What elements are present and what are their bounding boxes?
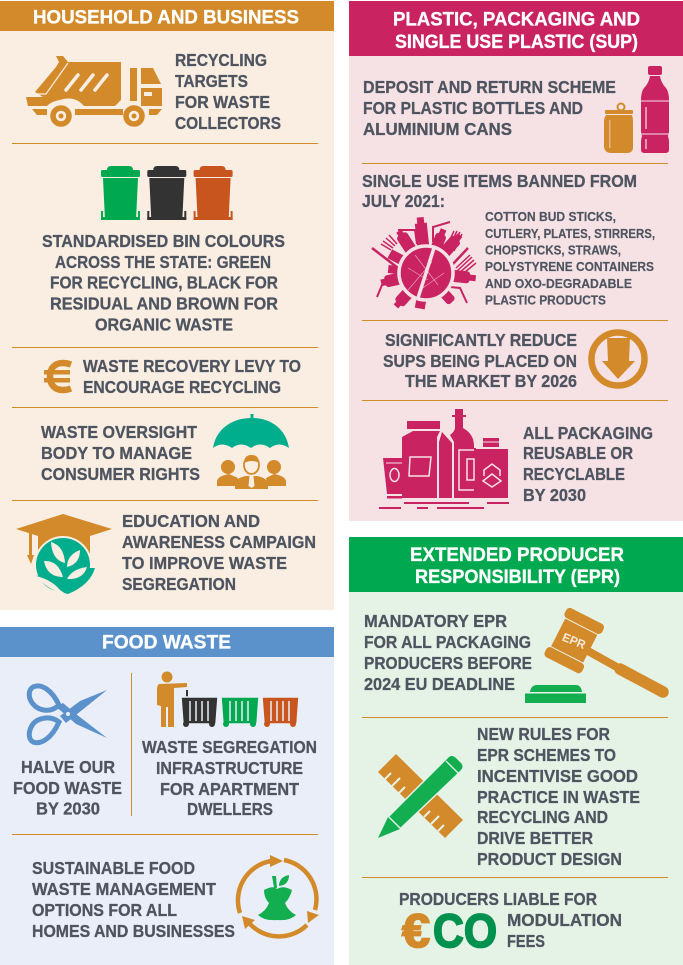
text: significantly reduce [383, 330, 577, 391]
text: waste segregation infrastructure: DWELLERS [187, 799, 273, 819]
text: single use items banned: SINGLE USE ITEMS BANNED FROM [362, 171, 637, 191]
panel: household and business [0, 1, 334, 610]
icon: gavel [525, 607, 663, 703]
panel: plastic, packaging and SUP [349, 1, 683, 521]
text: deposit and return [363, 77, 616, 139]
text: mandatory EPR: MANDATORY EPR [364, 611, 507, 631]
text: deposit and return: FOR PLASTIC BOTTLES AND [363, 98, 583, 118]
icon: person and bins [157, 672, 299, 727]
heading: food waste [0, 627, 334, 657]
text: all packaging reusable [523, 423, 653, 505]
logo: euro eco [402, 904, 497, 957]
icon: brown bin [194, 166, 233, 220]
heading: household and business [0, 1, 334, 31]
icon: can [604, 104, 633, 153]
text: modulation fees [507, 910, 622, 951]
logo: euro eco: CO [433, 904, 497, 957]
text: sustainable food waste: HOMES AND BUSINESSES [32, 921, 235, 941]
text: banned items list: AND OXO-DEGRADABLE [485, 276, 632, 291]
text: halve our food waste: BY 2030 [36, 798, 100, 818]
icon: packaging [379, 409, 509, 509]
text: new rules for EPR schemes: PRODUCT DESIGN [477, 849, 622, 869]
text: waste segregation infrastructure: WASTE SEGREGATION [142, 737, 317, 757]
text: standardised bin colours: FOR RECYCLING, BLACK FOR [50, 272, 278, 292]
text: banned items list: CUTLERY, PLATES, STIRRERS, [485, 226, 655, 241]
text: standardised bin colours: RESIDUAL AND BROWN FOR [50, 294, 278, 314]
text: waste oversight body: WASTE OVERSIGHT [41, 422, 197, 442]
text: all packaging reusable: ALL PACKAGING [523, 423, 653, 443]
text: recycling targets [175, 50, 281, 133]
heading: extended producer responsibility: RESPONSIBILITY (EPR) [415, 567, 620, 588]
icon: euro [44, 363, 71, 390]
icon: ruler and pencil [378, 754, 463, 838]
text: waste oversight body: CONSUMER RIGHTS [41, 464, 200, 484]
text: deposit and return: DEPOSIT AND RETURN SCHEME [363, 77, 616, 97]
panel: food waste [0, 627, 334, 965]
text: sustainable food waste: OPTIONS FOR ALL [32, 900, 177, 920]
text: new rules for EPR schemes: PRACTICE IN WASTE [477, 787, 640, 807]
text: significantly reduce: THE MARKET BY 2026 [405, 371, 577, 391]
icon: scissors [29, 686, 107, 743]
text: recycling targets: RECYCLING [175, 50, 267, 70]
panel: extended producer responsibility [349, 537, 683, 965]
text: all packaging reusable: RECYCLABLE [523, 464, 625, 484]
text: education and awareness: SEGREGATION [122, 574, 236, 594]
icon: down arrow in circle [592, 332, 644, 386]
text: all packaging reusable: REUSABLE OR [523, 443, 633, 463]
text: standardised bin colours: ACROSS THE STATE: GREEN [55, 252, 271, 272]
text: waste segregation infrastructure: INFRASTRUCTURE [156, 758, 303, 778]
heading: plastic, packaging and SUP: PLASTIC, PACKAGING AND [393, 10, 640, 30]
text: producers liable for: PRODUCERS LIABLE FOR [399, 889, 597, 909]
text: new rules for EPR schemes: DRIVE BETTER [477, 828, 593, 848]
text: waste segregation infrastructure [142, 737, 317, 819]
text: sustainable food waste: WASTE MANAGEMENT [32, 879, 216, 899]
text: single use items banned [362, 171, 637, 211]
icon: black bin [147, 166, 186, 220]
text: education and awareness: AWARENESS CAMPAIGN [122, 532, 316, 552]
text: recycling targets: FOR WASTE [175, 92, 270, 112]
heading: extended producer responsibility [349, 537, 683, 592]
text: new rules for EPR schemes: INCENTIVISE GOOD [477, 766, 638, 786]
text: recycling targets: TARGETS [175, 71, 248, 91]
text: banned items list [485, 209, 655, 308]
text: modulation fees: FEES [507, 931, 545, 951]
icon: umbrella over consumers [213, 414, 289, 489]
text: single use items banned: JULY 2021: [362, 191, 445, 211]
text: standardised bin colours: STANDARDISED BIN COLOURS [42, 231, 285, 251]
logo: euro eco: € [402, 904, 430, 957]
text: waste segregation infrastructure: FOR APARTMENT [160, 779, 299, 799]
text: new rules for EPR schemes: EPR SCHEMES TO [477, 745, 616, 765]
text: halve our food waste [13, 757, 122, 818]
heading: extended producer responsibility: EXTENDED PRODUCER [410, 545, 624, 566]
text: all packaging reusable: BY 2030 [523, 485, 586, 505]
icon: gavel: EPR [560, 630, 588, 652]
text: waste oversight body: BODY TO MANAGE [41, 443, 192, 463]
heading: plastic, packaging and SUP: SINGLE USE PLASTIC (SUP) [395, 32, 638, 53]
text: education and awareness [122, 511, 316, 594]
text: new rules for EPR schemes: RECYCLING AND [477, 807, 608, 827]
text: education and awareness: TO IMPROVE WASTE [122, 553, 287, 573]
text: banned items list: CHOPSTICKS, STRAWS, [485, 242, 621, 258]
text: waste recovery levy: ENCOURAGE RECYCLING [83, 377, 281, 397]
text: halve our food waste: FOOD WASTE [13, 778, 122, 798]
text: banned items list: PLASTIC PRODUCTS [485, 292, 606, 308]
text: education and awareness: EDUCATION AND [122, 511, 260, 531]
icon: banned single use items [372, 217, 476, 310]
text: mandatory EPR [364, 611, 532, 694]
heading: plastic, packaging and SUP [349, 1, 683, 56]
text: halve our food waste: HALVE OUR [21, 757, 115, 777]
text: sustainable food waste: SUSTAINABLE FOOD [32, 858, 195, 878]
icon: apple core in cycle [238, 855, 319, 936]
text: standardised bin colours [42, 231, 285, 334]
text: banned items list: COTTON BUD STICKS, [485, 209, 616, 224]
text: waste oversight body [41, 422, 200, 484]
text: mandatory EPR: 2024 EU DEADLINE [364, 674, 515, 694]
text: modulation fees: MODULATION [507, 910, 622, 930]
text: mandatory EPR: FOR ALL PACKAGING [364, 632, 531, 652]
text: new rules for EPR schemes: NEW RULES FOR [477, 724, 610, 744]
heading: food waste: FOOD WASTE [102, 632, 231, 654]
text: waste recovery levy: WASTE RECOVERY LEVY TO [83, 356, 301, 376]
text: standardised bin colours: ORGANIC WASTE [95, 314, 233, 334]
icon: green bin [101, 166, 140, 220]
text: banned items list: POLYSTYRENE CONTAINERS [485, 259, 654, 274]
text: new rules for EPR schemes [477, 724, 640, 869]
text: waste recovery levy [83, 356, 301, 397]
text: deposit and return: ALUMINIUM CANS [363, 119, 512, 139]
heading: household and business: HOUSEHOLD AND BUSINESS [33, 8, 299, 28]
text: significantly reduce: SIGNIFICANTLY REDUCE [385, 330, 577, 350]
text: mandatory EPR: PRODUCERS BEFORE [364, 653, 532, 673]
text: sustainable food waste [32, 858, 235, 941]
icon: bottle [641, 66, 669, 153]
icon: waste collection truck [26, 56, 162, 124]
text: recycling targets: COLLECTORS [175, 113, 281, 133]
text: significantly reduce: SUPS BEING PLACED ON [383, 351, 577, 371]
icon: graduation cap with leaves [16, 514, 112, 594]
